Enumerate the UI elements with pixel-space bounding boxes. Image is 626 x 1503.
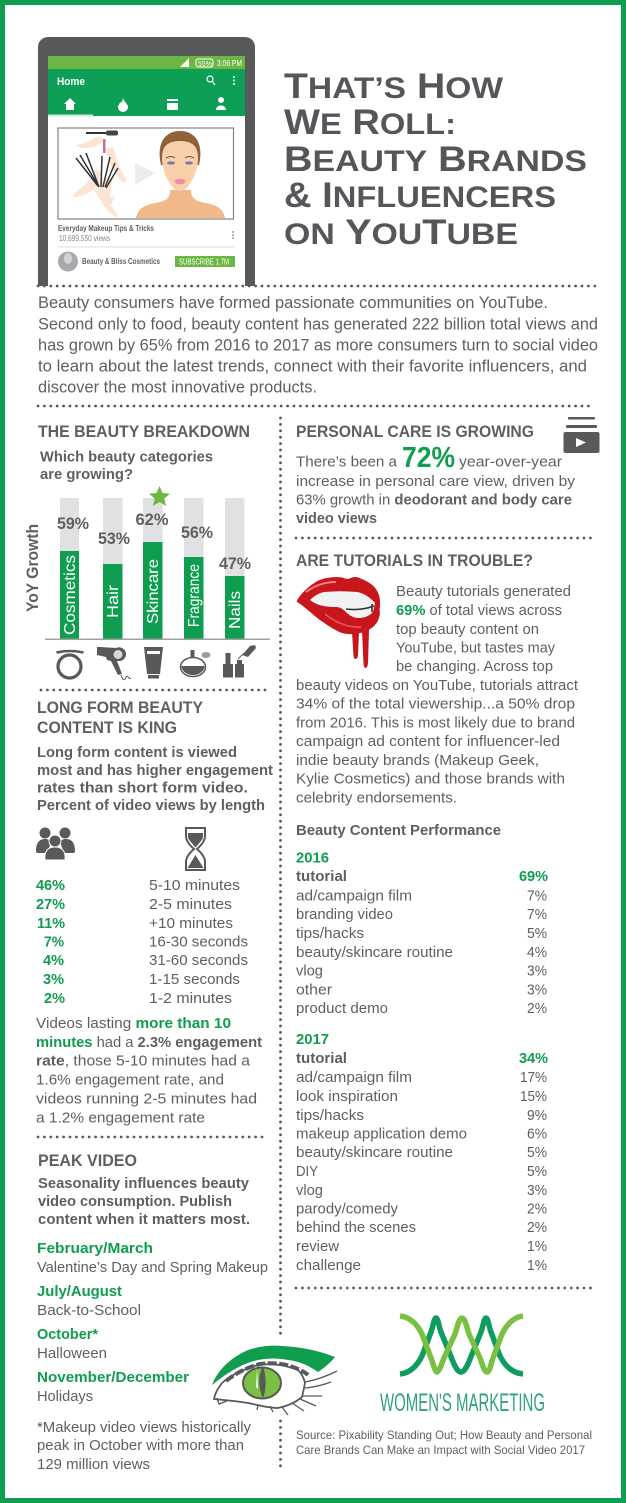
icon: video stack bbox=[564, 417, 600, 453]
bar labels: Nails bbox=[227, 591, 244, 629]
table 2017: beauty/skincare routine bbox=[296, 1144, 453, 1161]
tutorials paragraph: campaign ad content for influencer-led bbox=[296, 733, 560, 750]
status bar text bbox=[180, 58, 242, 68]
peak video description: video consumption. Publish bbox=[38, 1194, 232, 1210]
table 2016: beauty/skincare routine bbox=[296, 944, 453, 961]
axis title: YoY Growth bbox=[23, 524, 42, 612]
source: Source: Pixability Standing Out; How Beauty and Personal bbox=[296, 1428, 592, 1442]
hands and brushes bbox=[72, 137, 127, 218]
eyelid bbox=[212, 1346, 335, 1385]
peak video description bbox=[38, 1176, 250, 1228]
video length table: 2% bbox=[44, 990, 65, 1007]
table 2017: 5% bbox=[527, 1163, 547, 1180]
engagement paragraph bbox=[36, 1015, 262, 1126]
table 2016: 2016 bbox=[296, 850, 329, 866]
video title: Everyday Makeup Tips & Tricks bbox=[58, 224, 154, 233]
tutorials paragraph: YouTube, but tastes may bbox=[396, 640, 555, 656]
video length table: 31-60 seconds bbox=[149, 952, 248, 969]
video length table: 2-5 minutes bbox=[149, 896, 232, 913]
table 2016: 3% bbox=[527, 982, 547, 998]
status bar text: 55% bbox=[198, 61, 212, 68]
long form description: most and has higher engagement bbox=[37, 763, 273, 779]
tutorials paragraph: be changing. Across top bbox=[396, 658, 553, 675]
big stat: 72%: 72% bbox=[402, 442, 455, 474]
icon: lips bbox=[296, 577, 380, 668]
video length table: 11% bbox=[37, 915, 65, 932]
tutorials paragraph: 69% of total views across bbox=[396, 602, 562, 619]
table 2017 bbox=[296, 1031, 548, 1274]
video length table: 1-2 minutes bbox=[149, 990, 232, 1007]
table 2016: 7% bbox=[527, 888, 547, 904]
percent labels: 62% bbox=[136, 511, 169, 529]
table 2016: 5% bbox=[527, 925, 547, 942]
video length table: 46% bbox=[36, 877, 65, 894]
engagement paragraph: Videos lasting more than 10 bbox=[36, 1015, 231, 1032]
table 2016: 7% bbox=[527, 906, 547, 923]
table 2017: 2% bbox=[527, 1200, 547, 1218]
table 2017: 34% bbox=[519, 1050, 548, 1067]
intro paragraph: discover the most innovative products. bbox=[38, 378, 317, 396]
eye outline bbox=[214, 1364, 305, 1408]
video length table: 16-30 seconds bbox=[149, 934, 248, 950]
heading: peak video: PEAK VIDEO bbox=[38, 1151, 137, 1170]
table 2016 bbox=[296, 850, 548, 1017]
icon: star bbox=[149, 486, 170, 506]
seasonal list: Back-to-School bbox=[37, 1302, 141, 1319]
heading: content performance: Beauty Content Performance bbox=[296, 823, 501, 839]
app bar icons bbox=[64, 76, 235, 112]
title: THAT’S HOW bbox=[284, 67, 504, 106]
phone mockup bbox=[38, 37, 255, 286]
table 2016: product demo bbox=[296, 1000, 388, 1017]
engagement paragraph: a 1.2% engagement rate bbox=[36, 1110, 205, 1126]
table 2017: vlog bbox=[296, 1182, 323, 1199]
bar chart bbox=[23, 486, 270, 640]
table 2017: 17% bbox=[520, 1069, 547, 1086]
table 2017: look inspiration bbox=[296, 1088, 398, 1105]
video length table: 1-15 seconds bbox=[149, 971, 240, 988]
table 2017: parody/comedy bbox=[296, 1200, 398, 1218]
view count: 10,699,550 views bbox=[59, 234, 110, 243]
subscribe button bbox=[175, 256, 235, 267]
table 2017: review bbox=[296, 1238, 339, 1255]
title: BEAUTY BRANDS bbox=[284, 140, 587, 179]
channel avatar bbox=[58, 252, 78, 272]
icon: perfume bottle bbox=[180, 650, 210, 676]
footnote bbox=[37, 1419, 251, 1473]
bar labels: Fragrance bbox=[186, 564, 203, 627]
table 2017: tips/hacks bbox=[296, 1107, 364, 1124]
tutorials paragraph bbox=[296, 583, 579, 806]
icon: lotion tube bbox=[144, 647, 163, 678]
video length table: 4% bbox=[43, 952, 64, 969]
seasonal list: Valentine’s Day and Spring Makeup bbox=[37, 1259, 268, 1276]
table 2017: 1% bbox=[527, 1257, 547, 1274]
tutorials paragraph: Kylie Cosmetics) and those brands with bbox=[296, 770, 565, 788]
title: WE ROLL: bbox=[284, 103, 456, 142]
icon: compact bbox=[56, 651, 84, 678]
seasonal list: Holidays bbox=[37, 1388, 93, 1405]
personal care paragraph: There’s been a bbox=[296, 454, 398, 470]
seasonal list: Halloween bbox=[37, 1345, 107, 1362]
title: & INFLUENCERS bbox=[284, 176, 556, 215]
table 2017: 9% bbox=[527, 1107, 547, 1124]
video length table: 27% bbox=[36, 896, 65, 913]
table 2016: 2% bbox=[527, 1000, 547, 1017]
title: ON YOUTUBE bbox=[284, 213, 518, 252]
percent labels: 56% bbox=[181, 524, 213, 542]
lashes bbox=[217, 1371, 337, 1415]
source: Care Brands Can Make an Impact with Social Video 2017 bbox=[296, 1443, 585, 1457]
seasonal list bbox=[37, 1240, 268, 1405]
heading: personal care: PERSONAL CARE IS GROWING bbox=[296, 422, 534, 441]
bar labels: Hair bbox=[105, 584, 122, 618]
personal care paragraph bbox=[296, 442, 576, 527]
personal care paragraph: year-over-year bbox=[459, 454, 562, 470]
teeth bbox=[310, 591, 375, 618]
table 2017: behind the scenes bbox=[296, 1219, 416, 1236]
seasonal list: February/March bbox=[37, 1240, 153, 1257]
bar labels bbox=[62, 555, 244, 635]
seasonal list: October* bbox=[37, 1326, 98, 1343]
table 2016: 3% bbox=[527, 962, 547, 980]
table 2017: ad/campaign film bbox=[296, 1069, 412, 1086]
heading: long form: LONG FORM BEAUTY bbox=[37, 698, 204, 717]
table 2016: tips/hacks bbox=[296, 925, 364, 942]
channel name: Beauty & Bliss Cosmetics bbox=[82, 257, 160, 266]
seasonal list: July/August bbox=[37, 1283, 122, 1300]
app bar title: Home bbox=[57, 76, 85, 88]
tutorials paragraph: beauty videos on YouTube, tutorials attract bbox=[296, 677, 579, 694]
table 2017: 2017 bbox=[296, 1031, 329, 1048]
bar labels: Cosmetics bbox=[62, 555, 79, 635]
peak video description: content when it matters most. bbox=[38, 1212, 250, 1228]
percent labels: 47% bbox=[219, 555, 251, 573]
intro paragraph: has grown by 65% from 2016 to 2017 as more consumers turn to social video bbox=[38, 336, 598, 354]
footnote: 129 million views bbox=[37, 1456, 150, 1473]
face bbox=[162, 141, 198, 191]
table 2016: branding video bbox=[296, 906, 393, 923]
icon: hourglass bbox=[185, 828, 206, 870]
video length table: 5-10 minutes bbox=[149, 877, 240, 894]
table 2016: 69% bbox=[519, 868, 548, 885]
table 2017: 3% bbox=[527, 1182, 547, 1199]
intro paragraph bbox=[38, 294, 598, 396]
peak video description: Seasonality influences beauty bbox=[38, 1176, 249, 1192]
icon: nail polish bbox=[223, 645, 256, 678]
long form description: Percent of video views by length bbox=[37, 798, 265, 814]
bar labels: Skincare bbox=[145, 559, 162, 624]
lip shape bbox=[296, 577, 380, 634]
personal care paragraph: 63% growth in deodorant and body care bbox=[296, 492, 572, 508]
personal care paragraph: increase in personal care view, driven by bbox=[296, 473, 576, 490]
table 2017: 15% bbox=[520, 1088, 547, 1105]
tutorials paragraph: celebrity endorsements. bbox=[296, 790, 457, 806]
tutorials paragraph: Beauty tutorials generated bbox=[396, 583, 571, 600]
tutorials paragraph: top beauty content on bbox=[396, 621, 539, 638]
table 2016: vlog bbox=[296, 962, 323, 980]
tutorials paragraph: indie beauty brands (Makeup Geek, bbox=[296, 752, 539, 769]
video length table: +10 minutes bbox=[149, 915, 233, 932]
video length table bbox=[36, 877, 248, 1007]
table 2017: 2% bbox=[527, 1219, 547, 1236]
icon: hair dryer bbox=[97, 647, 131, 680]
seasonal list: November/December bbox=[37, 1369, 189, 1386]
icon: people bbox=[36, 828, 75, 860]
long form description bbox=[37, 745, 273, 814]
shoulders and neck bbox=[136, 190, 225, 218]
percent labels: 53% bbox=[98, 530, 130, 548]
subheading: which categories bbox=[40, 450, 213, 483]
table 2016: tutorial bbox=[296, 868, 347, 885]
footnote: *Makeup video views historically bbox=[37, 1419, 251, 1436]
subheading: which categories: Which beauty categories bbox=[40, 450, 213, 466]
table 2017: tutorial bbox=[296, 1050, 347, 1067]
engagement paragraph: 1.6% engagement rate, and bbox=[36, 1072, 224, 1088]
heading: long form: CONTENT IS KING bbox=[37, 718, 177, 737]
long form description: rates than short form video. bbox=[37, 780, 248, 796]
percent labels bbox=[57, 511, 251, 573]
intro paragraph: to learn about the latest trends, connect with their favorite influencers, and bbox=[38, 358, 587, 376]
tutorials paragraph: from 2016. This is most likely due to brand bbox=[296, 714, 575, 732]
hair bbox=[160, 131, 200, 165]
personal care paragraph: video views bbox=[296, 510, 377, 527]
heading: long form bbox=[37, 698, 204, 737]
icon: cat eye bbox=[212, 1346, 337, 1415]
table 2016: 4% bbox=[527, 944, 547, 961]
title bbox=[284, 67, 587, 252]
engagement paragraph: rate, those 5-10 minutes had a bbox=[36, 1052, 251, 1070]
video length table: 3% bbox=[43, 971, 64, 988]
footnote: peak in October with more than bbox=[37, 1437, 244, 1454]
intro paragraph: Beauty consumers have formed passionate communities on YouTube. bbox=[38, 294, 548, 312]
table 2017: 6% bbox=[527, 1126, 547, 1142]
drips bbox=[352, 630, 369, 668]
heading: tutorials: ARE TUTORIALS IN TROUBLE? bbox=[296, 551, 533, 570]
long form description: Long form content is viewed bbox=[37, 745, 237, 761]
percent labels: 59% bbox=[57, 515, 89, 533]
subscribe button: SUBSCRIBE 1.7M bbox=[179, 258, 229, 266]
table 2017: challenge bbox=[296, 1257, 361, 1274]
table 2017: makeup application demo bbox=[296, 1126, 467, 1142]
table 2016: other bbox=[296, 982, 332, 998]
engagement paragraph: videos running 2-5 minutes had bbox=[36, 1090, 257, 1108]
subheading: which categories: are growing? bbox=[40, 467, 133, 483]
logo mark bbox=[400, 1316, 523, 1374]
video thumbnail bbox=[58, 128, 234, 219]
table 2017: 5% bbox=[527, 1144, 547, 1161]
tutorials paragraph: 34% of the total viewership...a 50% drop bbox=[296, 696, 575, 712]
intro paragraph: Second only to food, beauty content has generated 222 billion total views and bbox=[38, 316, 598, 334]
video length table: 7% bbox=[44, 934, 64, 950]
heading: the beauty breakdown: THE BEAUTY BREAKDOWN bbox=[38, 422, 250, 441]
table 2016: ad/campaign film bbox=[296, 888, 412, 904]
table 2017: 1% bbox=[527, 1238, 547, 1255]
engagement paragraph: minutes had a 2.3% engagement bbox=[36, 1034, 262, 1051]
status bar text: 3:06 PM bbox=[217, 59, 242, 68]
table 2017: DIY bbox=[296, 1163, 318, 1180]
source bbox=[296, 1428, 592, 1457]
